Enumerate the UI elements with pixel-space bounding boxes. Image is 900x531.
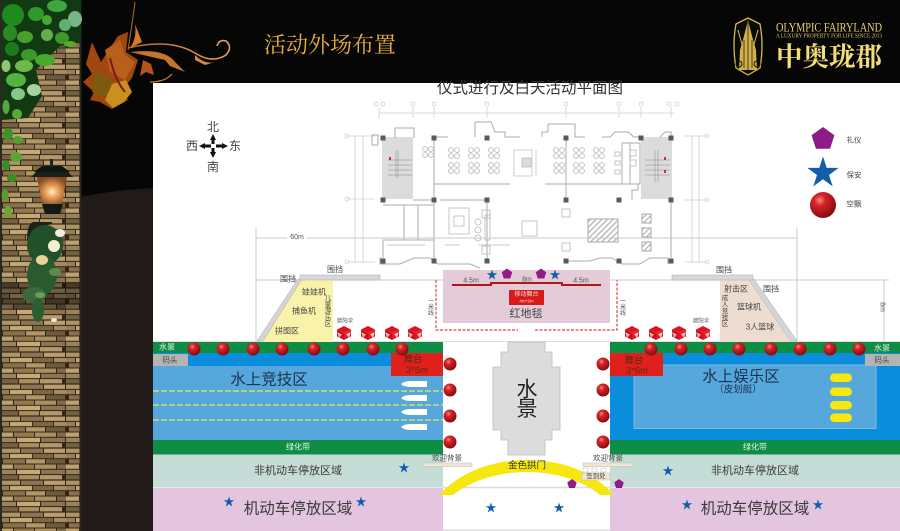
parasols left: 遮阳伞 (337, 316, 354, 324)
water entertainment zone (east): （皮划艇） (714, 384, 762, 396)
zone: children's play area: 区 (325, 319, 332, 327)
kayaks (830, 374, 852, 422)
stage 3x6m (610, 353, 663, 376)
sign-in desk: 签到处 (586, 471, 606, 480)
zone: adult play area: 技 (722, 312, 729, 321)
mobile stage: 移动舞台 (514, 290, 539, 298)
non-motor parking (153, 454, 900, 488)
mobile stage: 4m*2m (519, 298, 534, 304)
motor vehicle parking (153, 488, 900, 531)
non-motor parking: 非机动车停放区域 (711, 463, 799, 477)
stage 3x6m: 舞台 (403, 354, 423, 366)
red carpet area (428, 268, 626, 330)
stairwells (382, 137, 672, 199)
motor vehicle parking: 机动车停放区域 (701, 500, 809, 518)
zone: adult play area (672, 264, 797, 342)
welcome backdrop west (423, 452, 472, 466)
icon: autumn leaf ornament (83, 2, 230, 109)
pier: 码头 (874, 354, 890, 364)
water sports zone (west): 水景 (159, 342, 175, 352)
golden arch: 金色拱门 (508, 460, 546, 472)
red carpet area: 4.5m (463, 278, 479, 284)
red carpet area: 红地毯 (510, 306, 542, 320)
red carpet area: 4.5m (573, 278, 589, 284)
dimension: 8m: 8m (878, 302, 886, 312)
water sports zone (west): 水上竞技区 (230, 370, 308, 388)
compass: 北 (207, 120, 219, 134)
water feature (493, 342, 560, 455)
dimension lines (345, 102, 709, 264)
zone: adult play area: 成 (722, 292, 729, 302)
zone: adult play area: 围挡 (716, 264, 732, 274)
green belts: 绿化带 (286, 442, 310, 452)
legend (807, 127, 862, 218)
zone: children's play area: 游 (325, 306, 332, 314)
red carpet area: 线 (428, 309, 434, 317)
legend: balloon: 空飘 (846, 198, 862, 208)
zone: children's play area: 拼图区 (275, 326, 299, 336)
parasols right (625, 316, 710, 340)
zone: children's play area: 围挡 (280, 274, 296, 284)
boats (401, 381, 427, 430)
building floor plan (345, 102, 709, 268)
logo: Olympic Fairyland: 中奥珑郡 (776, 42, 882, 72)
zone: adult play area: 射击区 (724, 284, 748, 294)
zone: adult play area: 竞 (722, 306, 729, 314)
zone: adult play area: 篮球机 (737, 302, 761, 312)
parasols left (337, 316, 422, 340)
green belts (153, 440, 900, 454)
water feature: 景 (516, 398, 538, 421)
red carpet area: 一 (428, 299, 434, 305)
site boundary lines (153, 228, 900, 342)
panel: brick wall with lamp (0, 0, 82, 531)
wall lamp (27, 159, 73, 240)
etiquette markers (567, 479, 624, 488)
panel: white floor-plan sheet (153, 79, 900, 531)
welcome backdrop east: 欢迎背景 (593, 452, 623, 462)
red carpet area: 米 (428, 303, 434, 311)
welcome backdrop east (583, 452, 632, 466)
pier (153, 354, 188, 366)
stage 3x6m (391, 353, 443, 376)
zone: children's play area: 乐 (325, 312, 332, 321)
water entertainment zone (east): 水景 (874, 342, 890, 352)
water entertainment zone (east) (610, 342, 900, 440)
compass: 东 (229, 139, 241, 153)
ivy leaves (2, 0, 82, 218)
welcome backdrop west: 欢迎背景 (432, 452, 462, 462)
zone: children's play area (257, 264, 380, 342)
zone: children's play area: 童 (325, 299, 332, 308)
legend: security: 保安 (846, 170, 862, 180)
stage 3x6m: 舞台 (624, 354, 644, 366)
zone: adult play area: 3人篮球 (746, 322, 774, 332)
zone: children's play area: 娃娃机 (302, 286, 326, 296)
lane lines (153, 391, 443, 420)
plan heading: 仪式进行及白天活动平面图 (437, 79, 623, 97)
columns (380, 136, 674, 264)
entrance road line (443, 488, 610, 530)
stage 3x6m: 3*6m (626, 366, 648, 376)
climbing roses (22, 225, 65, 322)
red carpet area: 8m (522, 276, 532, 284)
balloons (188, 342, 866, 448)
red carpet area: 线 (620, 309, 626, 317)
legend: etiquette staff: 礼仪 (846, 134, 862, 144)
security markers (224, 462, 823, 512)
red carpet area: 一 (620, 299, 626, 305)
parasols right: 遮阳伞 (693, 316, 710, 324)
title: 活动外场布置 (264, 32, 396, 58)
water entertainment zone (east): 水上娱乐区 (702, 368, 780, 386)
logo: Olympic Fairyland (734, 18, 882, 75)
red carpet area: 米 (620, 303, 626, 311)
water sports zone (west) (153, 342, 443, 440)
compass (186, 120, 241, 174)
walls (372, 122, 671, 268)
green belts: 绿化带 (743, 442, 767, 452)
zone: adult play area: 围挡 (763, 284, 779, 294)
dimension: 60m (287, 233, 307, 242)
compass: 南 (207, 159, 219, 174)
zone: adult play area: 人 (722, 300, 729, 308)
round tables (423, 147, 604, 176)
zone: children's play area: 围挡 (327, 264, 343, 274)
sign-in desk (582, 468, 610, 480)
mobile stage (509, 290, 544, 305)
pier: 码头 (162, 354, 178, 364)
icon: gold tower crest (734, 18, 762, 75)
motor vehicle parking: 机动车停放区域 (244, 500, 352, 518)
compass: 西 (186, 139, 198, 153)
hatched plinths (588, 214, 651, 251)
stage 3x6m: 3*6m (406, 365, 428, 376)
water feature: 水 (516, 378, 538, 402)
golden arch (439, 460, 614, 495)
rooms and furniture (387, 150, 636, 254)
zone: children's play area: 捕鱼机 (292, 306, 316, 316)
dimension: 60m: 60m (290, 234, 304, 241)
non-motor parking: 非机动车停放区域 (254, 463, 342, 477)
pier (865, 354, 900, 366)
zone: adult play area: 区 (722, 319, 729, 327)
zone: children's play area: 儿 (325, 294, 332, 302)
